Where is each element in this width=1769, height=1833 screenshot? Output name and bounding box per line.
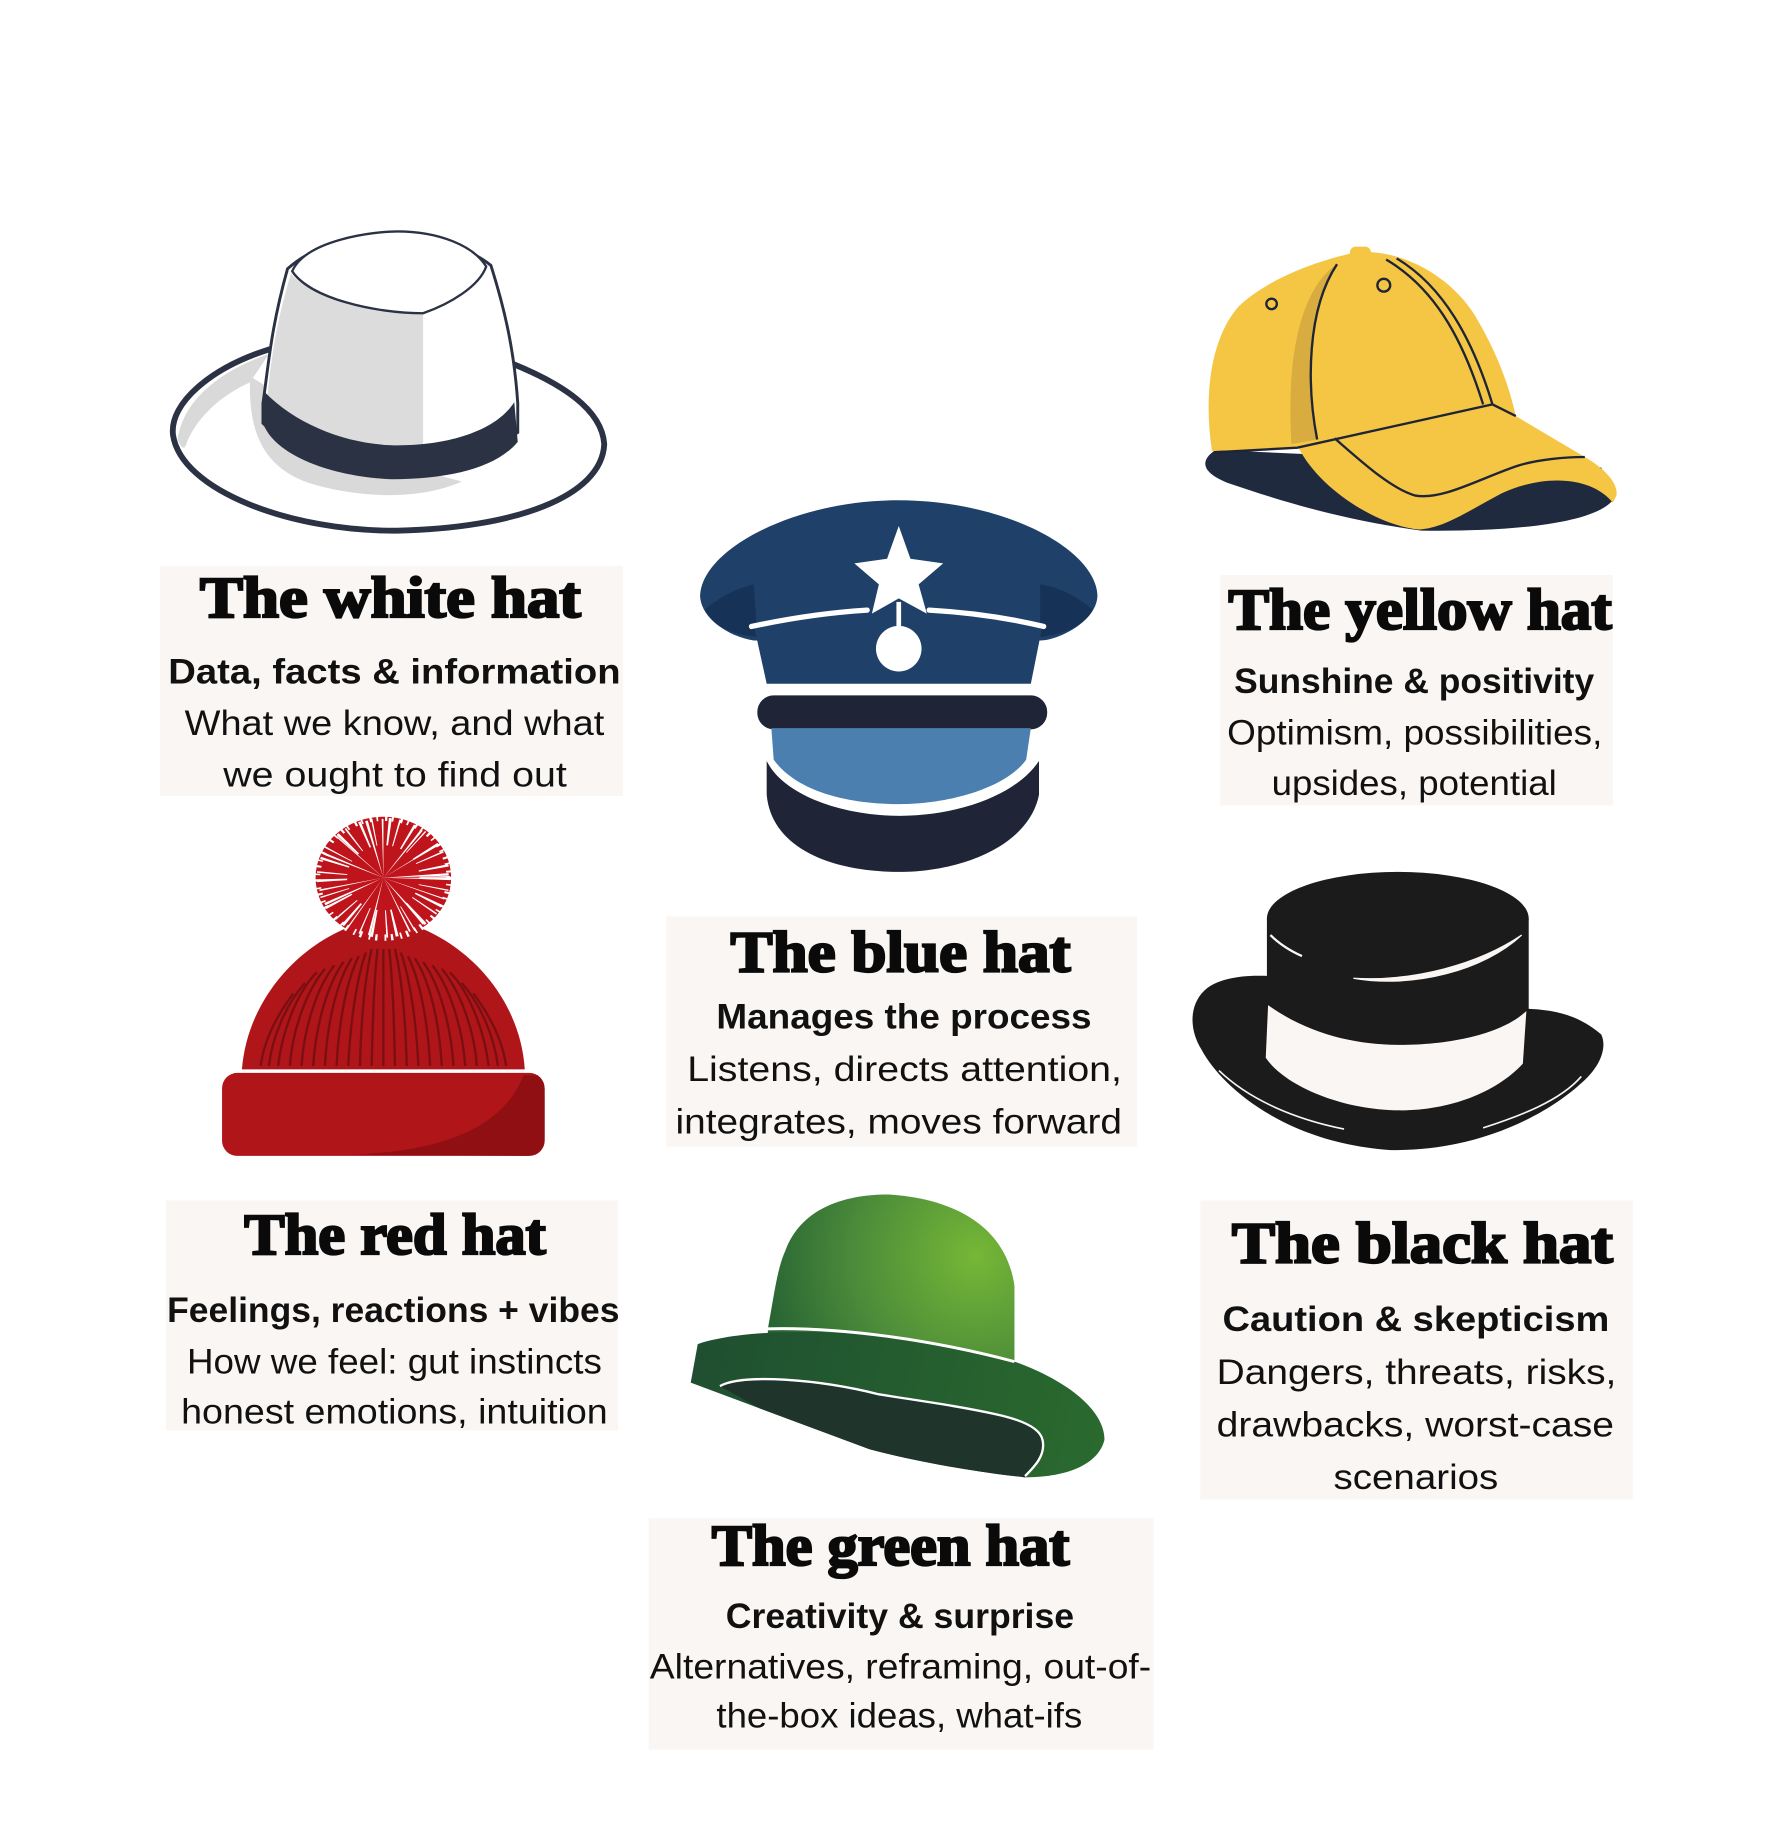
description: white hat: What we know, and what — [185, 704, 605, 743]
description: white hat — [185, 704, 605, 795]
description: blue hat: integrates, moves forward — [676, 1103, 1122, 1142]
panel: red hat — [166, 817, 619, 1432]
panel: white hat — [160, 231, 623, 796]
subheading: creativity: Creativity & surprise — [726, 1597, 1074, 1636]
card: white hat — [160, 565, 623, 796]
heading: red hat: The red hat — [244, 1202, 546, 1267]
description: blue hat — [676, 1050, 1122, 1142]
description: yellow hat: upsides, potential — [1272, 764, 1557, 803]
panel: yellow hat — [1205, 247, 1617, 805]
description: blue hat: Listens, directs attention, — [687, 1050, 1122, 1089]
heading: blue hat: The blue hat — [730, 919, 1071, 984]
card: red hat — [166, 1200, 619, 1432]
description: white hat: we ought to find out — [222, 756, 567, 795]
subheading: manages the process: Manages the process — [716, 998, 1092, 1037]
card: yellow hat — [1220, 575, 1613, 805]
subheading: sunshine: Sunshine & positivity — [1234, 662, 1595, 701]
card: blue hat — [666, 916, 1137, 1147]
description: yellow hat: Optimism, possibilities, — [1227, 714, 1602, 753]
heading: black hat: The black hat — [1232, 1210, 1613, 1275]
heading: green hat: The green hat — [712, 1513, 1070, 1578]
description: black hat: drawbacks, worst-case — [1217, 1405, 1614, 1444]
subheading: feelings: Feelings, reactions + vibes — [167, 1291, 619, 1330]
icon: yellow baseball cap — [1205, 247, 1617, 531]
icon: black boater hat — [1193, 872, 1603, 1150]
description: black hat: Dangers, threats, risks, — [1217, 1353, 1616, 1392]
subheading: data, facts: Data, facts & information — [168, 653, 621, 692]
subheading: caution: Caution & skepticism — [1222, 1300, 1609, 1339]
description: red hat: How we feel: gut instincts — [187, 1342, 602, 1381]
heading: white hat: The white hat — [200, 565, 581, 630]
description: black hat: scenarios — [1334, 1458, 1498, 1497]
description: yellow hat — [1227, 714, 1602, 803]
icon: white hat — [173, 231, 604, 531]
heading: yellow hat: The yellow hat — [1228, 577, 1612, 642]
card: black hat — [1200, 1200, 1633, 1500]
panel: green hat — [649, 1194, 1154, 1750]
description: red hat: honest emotions, intuition — [181, 1393, 608, 1432]
description: green hat: Alternatives, reframing, out-of- — [650, 1647, 1151, 1686]
description: green hat — [650, 1647, 1151, 1735]
icon: blue officer cap — [700, 500, 1097, 872]
card: green hat — [649, 1513, 1154, 1750]
description: green hat: the-box ideas, what-ifs — [716, 1696, 1082, 1735]
icon: red beanie — [222, 817, 545, 1156]
icon: green bowler hat — [691, 1194, 1104, 1477]
description: red hat — [181, 1342, 608, 1432]
description: black hat — [1217, 1353, 1616, 1497]
panel: black hat — [1193, 872, 1633, 1500]
panel: blue hat — [666, 500, 1137, 1147]
